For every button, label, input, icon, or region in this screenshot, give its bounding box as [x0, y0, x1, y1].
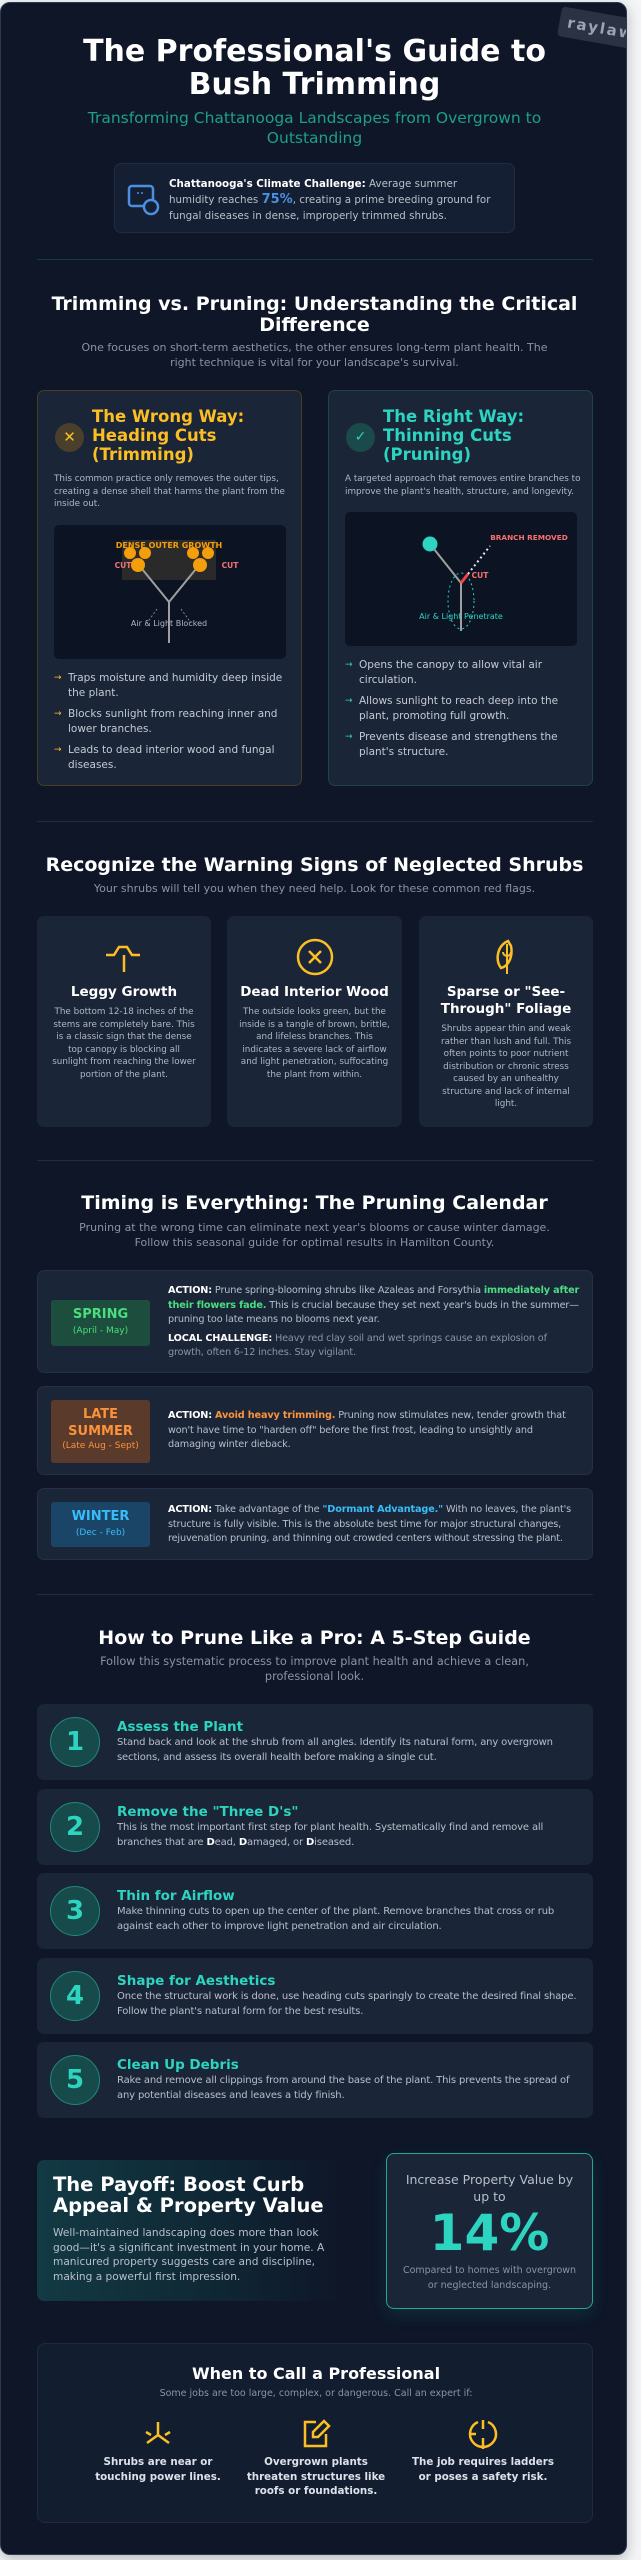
step 4 [37, 1958, 593, 2034]
call subtitle: Some jobs are too large, complex, or dangerous. Call an expert if: [160, 2388, 472, 2399]
icon: x [55, 423, 84, 452]
payoff title: Appeal & Property Value [53, 2194, 324, 2217]
wrong title [92, 407, 244, 464]
sparse title: Sparse or "See-Through" Foliage [441, 984, 571, 1017]
diagram: heading cuts: CUT [115, 561, 132, 570]
spring text: LOCAL CHALLENGE: Heavy red clay soil and wet springs cause an explosion of growth, often 6-12 inches. Stay vigilant. [168, 1332, 547, 1358]
diagram: heading cuts: Air & Light Blocked [131, 619, 207, 628]
item: power lines [95, 2422, 221, 2482]
right bullets: Opens the canopy to allow vital air circulation. [359, 659, 542, 686]
wrong title: (Trimming) [92, 445, 194, 464]
step 2 [37, 1789, 593, 1865]
watermark tag [557, 6, 641, 50]
label: winter: (Dec - Feb) [76, 1528, 125, 1538]
payoff text: Well-maintained landscaping does more than look good—it's a significant investment in your home. A manicured property suggests care and discipline, making a powerful first impression. [53, 2227, 324, 2283]
subtitle: Transforming Chattanooga Landscapes from Overgrown to Outstanding [88, 109, 541, 147]
icon: check: ✓ [355, 429, 366, 445]
winter text: ACTION: Take advantage of the "Dormant Advantage." With no leaves, the plant's structure is fully visible. This is the absolute best time for major structural changes, rejuvenation pruning, and thinning out crowded centers without stressing the plant. [168, 1504, 571, 1544]
spring text: ACTION: Prune spring-blooming shrubs like Azaleas and Forsythia immediately after their flowers fade. This is crucial because they set next year's buds in the summer—pruning too late means no blooms next year. [168, 1285, 579, 1325]
right bullets: Allows sunlight to reach deep into the plant, promoting full growth. [359, 695, 558, 722]
step 5 [37, 2042, 593, 2118]
warning subtitle: Your shrubs will tell you when they need help. Look for these common red flags. [94, 882, 535, 895]
step 1 [37, 1704, 593, 1780]
timing subtitle: Pruning at the wrong time can eliminate next year's blooms or cause winter damage. Follow this seasonal guide for optimal results in Hamilton County. [79, 1221, 550, 1249]
step 3: Make thinning cuts to open up the center of the plant. Remove branches that cross or rub against each other to improve light penetration and air circulation. [117, 1906, 554, 1932]
label: winter [51, 1502, 150, 1547]
diagram: thinning cuts [345, 512, 577, 646]
panel: leggy growth [37, 916, 211, 1127]
payoff title [53, 2173, 324, 2217]
diagram: heading cuts: DENSE OUTER GROWTH [116, 541, 222, 550]
title: The Professional's Guide to [83, 34, 546, 69]
step 5: Clean Up Debris [117, 2057, 239, 2073]
dead wood desc: The outside looks green, but the inside is a tangle of brown, brittle, and lifeless branches. This indicates a severe lack of airflow and light penetration, suffocating the plant from within. [239, 1007, 390, 1080]
step 1: 1 [66, 1727, 84, 1757]
item: structures: Overgrown plants threaten structures like roofs or foundations. [247, 2456, 385, 2497]
item: ladders [412, 2420, 554, 2482]
diagram: thinning cuts: Air & Light Penetrate [419, 612, 503, 621]
call heading: When to Call a Professional [192, 2364, 440, 2383]
section heading: trimming vs pruning: Trimming vs. Pruning: Understanding the Critical Difference [52, 293, 577, 336]
right bullets: Prevents disease and strengthens the plant's structure. [359, 731, 558, 758]
label: winter: WINTER [72, 1509, 129, 1524]
label: late summer: SUMMER [68, 1424, 133, 1439]
right desc: A targeted approach that removes entire branches to improve the plant's health, structure, and longevity. [345, 474, 580, 496]
leggy title: Leggy Growth [71, 984, 177, 1000]
step 3 [37, 1873, 593, 1949]
wrong desc: This common practice only removes the outer tips, creating a dense shell that harms the plant from the inside out. [54, 474, 285, 509]
diagram: heading cuts [54, 525, 286, 659]
item: structures [247, 2419, 385, 2497]
right title: The Right Way: [383, 407, 524, 426]
step 3: 3 [66, 1896, 84, 1926]
panel: payoff [37, 2160, 347, 2301]
label: spring: (April - May) [73, 1326, 128, 1336]
right bullets [346, 659, 558, 758]
wrong bullets: Leads to dead interior wood and fungal diseases. [68, 744, 274, 771]
label: late summer [51, 1400, 150, 1463]
leggy desc: The bottom 12-18 inches of the stems are completely bare. This is a classic sign that the dense top canopy is blocking all sunlight from reaching the lower portion of the plant. [52, 1007, 196, 1080]
icon: check [346, 423, 375, 452]
label: spring: SPRING [73, 1307, 128, 1322]
diagram: thinning cuts: CUT [472, 571, 489, 580]
step 5: 5 [66, 2065, 84, 2095]
step 4: Once the structural work is done, use heading cuts sparingly to create the desired final shape. Follow the plant's natural form for the best results. [117, 1991, 576, 2016]
step 3: Thin for Airflow [117, 1888, 235, 1904]
label: spring [51, 1300, 150, 1346]
wrong bullets: Traps moisture and humidity deep inside the plant. [68, 672, 282, 699]
callout text: Chattanooga's Climate Challenge: Average summer humidity reaches 75%, creating a prime breeding ground for fungal diseases in dense, improperly trimmed shrubs. [169, 178, 490, 222]
section heading: warning signs: Recognize the Warning Signs of Neglected Shrubs [46, 854, 583, 876]
panel: dead interior wood [227, 916, 402, 1127]
icon: humidity screen [128, 184, 160, 216]
label: late summer: LATE [83, 1407, 118, 1422]
sparse desc: Shrubs appear thin and weak rather than lush and full. This often points to poor nutrient distribution or chronic stress caused by an unhealthy structure and lack of internal light. [441, 1024, 571, 1109]
title [83, 34, 546, 102]
spring text [168, 1285, 580, 1358]
wrong bullets [54, 672, 282, 771]
steps subtitle: Follow this systematic process to improve plant health and achieve a clean, professional look. [100, 1655, 529, 1683]
icon: x: ✕ [63, 428, 76, 446]
icon: leggy [106, 946, 140, 972]
stat: 14%: Compared to homes with overgrown or neglected landscaping. [403, 2265, 576, 2290]
panel: late summer [37, 1386, 593, 1475]
item: power lines: Shrubs are near or touching power lines. [95, 2456, 221, 2482]
late summer text: ACTION: Avoid heavy trimming. Pruning now stimulates new, tender growth that won't have time to "harden off" before the first frost, leading to unsightly and damaging winter dieback. [168, 1410, 566, 1450]
step 4: Shape for Aesthetics [117, 1973, 275, 1989]
panel: when to call a professional [37, 2343, 593, 2523]
section heading: timing: Timing is Everything: The Pruning Calendar [81, 1192, 548, 1214]
step 1: Assess the Plant [117, 1719, 243, 1735]
step 2: Remove the "Three D's" [117, 1804, 298, 1820]
right title: Thinning Cuts [383, 426, 512, 445]
dead wood title: Dead Interior Wood [240, 984, 389, 1000]
step 5: Rake and remove all clippings from around the base of the plant. This prevents the spread of any potential diseases and leaves a tidy finish. [117, 2075, 569, 2100]
icon: x circle [296, 938, 334, 976]
title: Bush Trimming [189, 67, 440, 102]
step 1: Stand back and look at the shrub from all angles. Identify its natural form, any overgrown sections, and assess its overall health before making a single cut. [117, 1737, 553, 1762]
wrong bullets: Blocks sunlight from reaching inner and lower branches. [68, 708, 277, 735]
right title [383, 407, 524, 464]
panel: wrong way [37, 390, 302, 786]
stat: 14% [386, 2153, 593, 2309]
stat: 14%: 14% [430, 2204, 549, 2262]
panel: spring [37, 1270, 593, 1373]
diagram: thinning cuts: BRANCH REMOVED [490, 533, 568, 542]
step 2: This is the most important first step for plant health. Systematically find and remove all branches that are Dead, Damaged, or Diseased. [117, 1822, 543, 1848]
payoff title: The Payoff: Boost Curb [53, 2173, 304, 2196]
panel: winter [37, 1488, 593, 1560]
label: late summer: (Late Aug - Sept) [62, 1441, 139, 1451]
item: ladders: The job requires ladders or poses a safety risk. [412, 2456, 554, 2482]
step 2: 2 [66, 1812, 84, 1842]
panel: right way [328, 390, 593, 786]
right title: (Pruning) [383, 445, 471, 464]
icon: leaf [496, 939, 513, 974]
panel: sparse foliage [419, 916, 593, 1127]
wrong title: The Wrong Way: [92, 407, 244, 426]
step 4: 4 [66, 1981, 84, 2011]
stat: 14%: Increase Property Value by up to [406, 2172, 573, 2204]
section subtitle: One focuses on short-term aesthetics, the other ensures long-term plant health. The right technique is vital for your landscape's survival. [82, 341, 547, 369]
diagram: heading cuts: CUT [222, 561, 239, 570]
wrong title: Heading Cuts [92, 426, 216, 445]
section heading: 5 steps: How to Prune Like a Pro: A 5-Step Guide [98, 1627, 531, 1649]
climate callout [114, 163, 515, 233]
